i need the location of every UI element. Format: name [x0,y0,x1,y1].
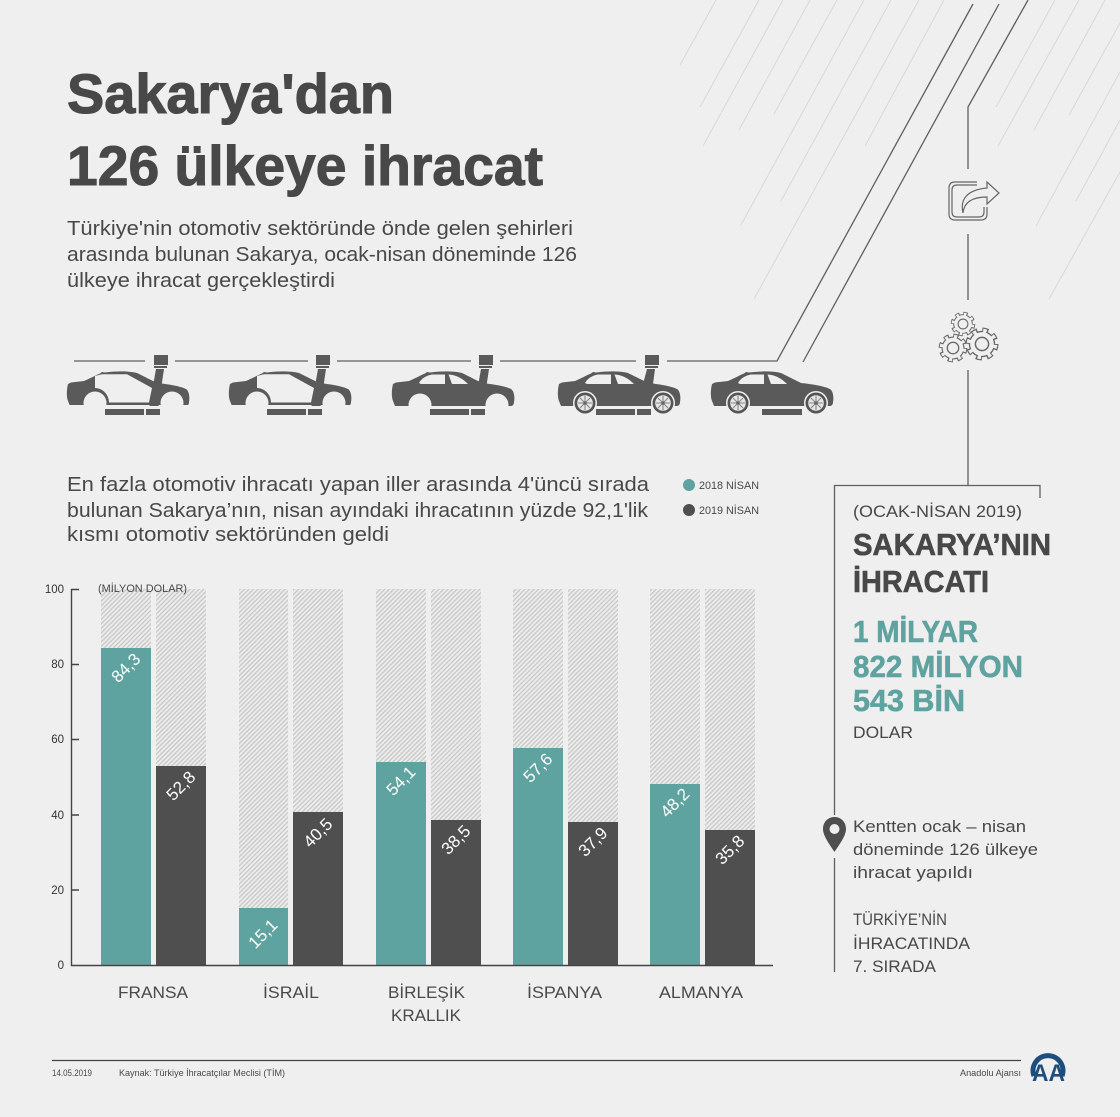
axis labels: 0 [58,960,64,972]
currency: DOLAR [853,723,913,742]
panel heading: SAKARYA’NIN [853,527,1051,562]
icon: car assembly stage 4 [558,355,680,415]
country labels: ALMANYA [659,983,744,1002]
bar chart [45,582,773,1025]
legend [683,479,759,517]
legend: 2019 NİSAN [699,504,759,517]
value labels: 35,8 [712,832,748,868]
country labels: FRANSA [118,983,189,1002]
footer: Kaynak: Türkiye İhracatçılar Meclisi (TİM) [119,1068,285,1079]
value labels: 57,6 [520,750,556,786]
country count text: döneminde 126 ülkeye [853,840,1038,859]
footer: Anadolu Ajansı [960,1068,1021,1079]
axis labels: 80 [51,659,64,671]
title: 126 ülkeye ihracat [67,134,543,197]
value labels: 54,1 [383,763,419,799]
axis labels: 20 [51,885,64,897]
panel: export summary [823,486,1051,976]
chart description text: En fazla otomotiv ihracatı yapan iller arasında 4'üncü sırada [67,474,650,496]
country count text [853,817,1038,882]
rank text: TÜRKİYE’NİN [853,910,947,929]
export value: 543 BİN [853,683,965,718]
icon: share arrow [949,182,999,220]
value labels: 40,5 [300,815,336,851]
intro text block: ülkeye ihracat gerçekleştirdi [67,269,335,292]
bars: 2019 [156,766,755,965]
chart description text: kısmı otomotiv sektöründen geldi [67,524,389,546]
country count text: Kentten ocak – nisan [853,817,1026,836]
country labels [118,983,744,1025]
intro text block [67,217,577,292]
icon: location pin [823,817,846,852]
axis labels: 100 [45,584,64,596]
intro text block: arasında bulunan Sakarya, ocak-nisan döneminde 126 [67,243,577,266]
footer [52,1060,1021,1079]
icon: car assembly stage 3 [392,355,514,416]
country labels: İSPANYA [527,983,603,1002]
value labels: 15,1 [245,916,281,952]
legend: 2018 NİSAN [699,479,759,492]
axis labels: (MİLYON DOLAR) [98,582,187,595]
icon: gears [942,314,995,360]
icon: car assembly stage 1 [66,355,191,415]
axis labels: 40 [51,810,64,822]
axis labels [45,582,187,972]
country labels: BİRLEŞİK [388,983,466,1002]
period label: (OCAK-NİSAN 2019) [853,502,1022,521]
bars: 2018 [101,648,700,965]
value labels [108,650,748,952]
value labels: 37,9 [575,824,611,860]
intro text block: Türkiye'nin otomotiv sektöründe önde gelen şehirleri [67,217,573,240]
rank text: İHRACATINDA [853,934,971,953]
panel heading [853,527,1051,599]
value labels: 84,3 [108,650,144,686]
title [67,62,543,197]
value labels: 48,2 [657,785,693,821]
title: Sakarya'dan [67,62,394,125]
country count text: ihracat yapıldı [853,863,973,882]
icon: agency logo: AA [1032,1060,1065,1087]
icon: car assembly stage 2 [228,355,353,415]
axis labels: 60 [51,734,64,746]
chart description text: bulunan Sakarya’nın, nisan ayındaki ihracatının yüzde 92,1'lik [67,500,649,522]
rank text [853,910,971,976]
export value [853,614,1023,718]
value labels: 52,8 [163,768,199,804]
export value: 1 MİLYAR [853,614,978,649]
bar backgrounds [101,589,755,965]
chart description text [67,474,650,546]
export value: 822 MİLYON [853,649,1023,684]
country labels: KRALLIK [391,1006,462,1025]
footer: 14.05.2019 [52,1068,92,1079]
panel heading: İHRACATI [853,564,989,599]
country labels: İSRAİL [263,983,319,1002]
rank text: 7. SIRADA [853,957,937,976]
value labels: 38,5 [438,822,474,858]
axes [71,589,773,966]
icon: finished car [711,371,833,415]
assembly line wires [74,0,1028,485]
